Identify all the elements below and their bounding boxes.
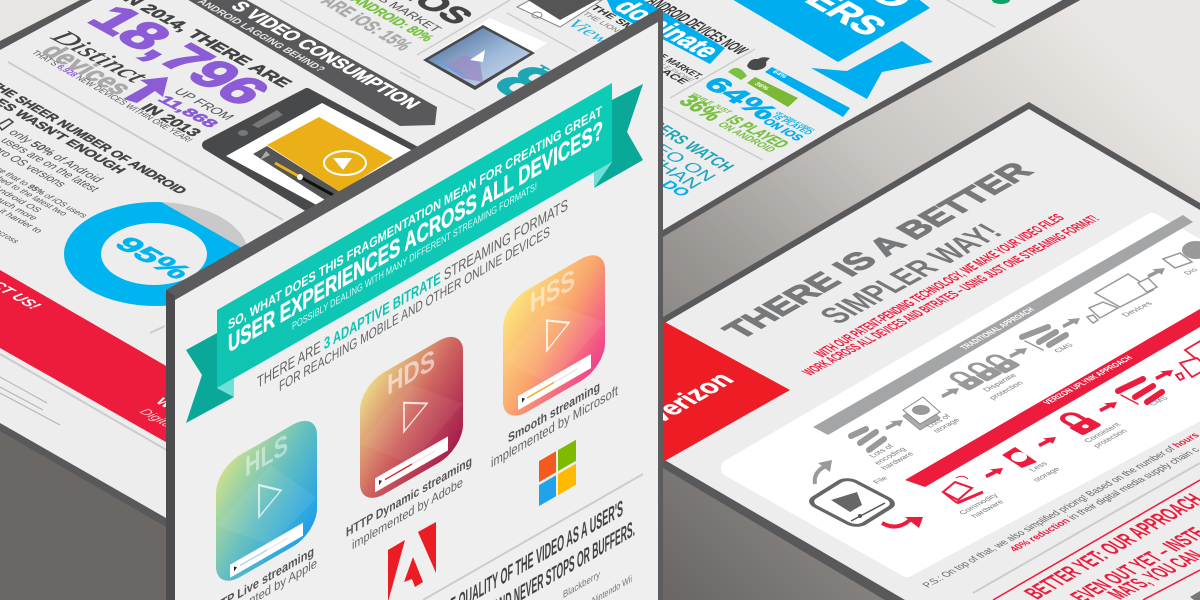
icon: red drive (1002, 447, 1037, 468)
panel: right infographic sheet (638, 102, 1200, 600)
icon: encoding hardware (851, 429, 884, 450)
bar: ios share (765, 67, 850, 117)
icon: device outline (0, 119, 13, 130)
arrow: grey 5 (1148, 268, 1165, 276)
icon: storage stack (903, 397, 940, 430)
green dot (992, 0, 1010, 4)
label: encoding hardware: Lots of (867, 443, 896, 459)
control bar (230, 523, 303, 578)
icon: smartphone video (207, 93, 460, 235)
heading line 2: SIMPLER WAY! (812, 219, 1011, 329)
icon: devices grey (1087, 274, 1157, 323)
icon: apple (747, 57, 770, 70)
band sub text: Digital (136, 407, 180, 431)
icon: CMS red (1118, 379, 1162, 404)
verizon label: VERIZON UPLYNK APPROACH (1041, 354, 1135, 406)
arrow: to traditional (815, 460, 832, 484)
label: encoding hardware: encoding (872, 446, 908, 466)
band text: We (152, 396, 184, 414)
market line: E MARKET, (655, 53, 705, 81)
play icon (404, 389, 427, 432)
platform list 1: Blackberry (563, 568, 600, 600)
body copy: users are on the latest (0, 136, 103, 194)
HLS label: HLS (245, 428, 288, 484)
chart: 95 percent donut (64, 202, 248, 306)
banner heading: S VIDEO CONSUMPTION (226, 0, 425, 112)
verizon header bar (905, 309, 1200, 487)
bar: android share: 36% (752, 82, 770, 91)
label: distribution: Dis (1182, 267, 1200, 276)
sub caption: THAT'S 6,928 NEW DEVICES WITHIN ONE YEAR! (29, 49, 195, 143)
icon: windows logo (539, 440, 576, 506)
ribbon: left fold (217, 378, 234, 397)
icon: devices red (1176, 340, 1200, 380)
control bar (518, 354, 591, 410)
arrow: red 3 (1100, 402, 1117, 410)
card: HLS (216, 411, 317, 591)
body copy (0, 128, 107, 245)
label: storage (924, 413, 963, 434)
red outlined callout (993, 480, 1200, 600)
place line: ACE (657, 68, 690, 86)
chart: 95 percent donut: 95% (107, 233, 199, 284)
intro line 2: FOR REACHING MOBILE AND OTHER ONLINE DEVICES (279, 224, 550, 395)
HDS label: HDS (387, 344, 435, 402)
icon: commodity laptop (943, 476, 983, 503)
control bar (375, 436, 448, 492)
teal text block: DO (656, 179, 693, 199)
previous number: 11,868 (153, 94, 222, 130)
cyan dominate ribbon (606, 0, 725, 64)
big cyan ribbon tail (811, 41, 933, 99)
HDS caption: HTTP Dynamic streaming (346, 453, 472, 540)
arrow: grey 4 (1063, 318, 1080, 326)
arrow: red 1 (986, 468, 1003, 476)
teal big number: 8 (477, 57, 574, 110)
icon: android (728, 68, 747, 80)
arrow: grey 1 (886, 420, 903, 428)
up from: UP FROM (170, 86, 238, 122)
intro line 1: THERE ARE 3 ADAPTIVE BITRATE STREAMING FORMATS (257, 195, 568, 392)
label: commodity: Commodity (957, 492, 1000, 516)
label: consistent: Consistent (1082, 421, 1123, 444)
icon: up arrow (123, 77, 168, 103)
traditional label: TRADITIONAL APPROACH (958, 306, 1037, 351)
play icon (259, 472, 281, 517)
HDS caption: implemented by Adobe (352, 474, 463, 552)
icon: red lock (1055, 410, 1102, 436)
label: protection: protection (987, 380, 1025, 401)
label: storage: Lots of (924, 413, 953, 429)
label: less storage: Less (1027, 461, 1050, 473)
teal heading: TH (527, 63, 564, 83)
36 percent: 36% (674, 92, 728, 125)
while just: WHILE JUST (688, 92, 734, 115)
traditional header bar (813, 215, 1193, 435)
arrow: grey 2 (942, 388, 959, 396)
panel: back infographic sheet (0, 0, 1084, 527)
label: encoding hardware (867, 443, 916, 471)
label: encoding hardware: hardware (879, 450, 916, 471)
bar: android share (747, 77, 798, 107)
icon: adobe logo (388, 522, 436, 600)
background: light top-left corner (0, 0, 90, 46)
label: consistent (1082, 421, 1129, 449)
ribbon: right fold (594, 162, 612, 188)
mobile video caption: OF MOBILE VIDEO (773, 111, 816, 133)
icon: three locks (946, 352, 1021, 391)
label: CMS red row: CMS (1147, 395, 1170, 407)
small grey caption: THE LION'S (580, 11, 628, 37)
ribbon heading line 1: SO, WHAT DOES THIS FRAGMENTATION MEAN FOR CREATING GREAT (228, 104, 602, 334)
fine print (0, 377, 60, 425)
phone line: LE PHONE (658, 63, 696, 83)
banner subheading: ANDROID LAGGING BEHIND? (194, 0, 327, 74)
label: protection: Disparate (981, 372, 1019, 393)
label: CMS: CMS (1052, 342, 1075, 354)
arrow: red 2 (1039, 437, 1056, 446)
green played: IS PLAYED (721, 113, 793, 150)
teal text block: USERS WATCH (637, 113, 739, 174)
script word: Distinct (44, 26, 156, 87)
icon: tablet video (423, 18, 547, 90)
ribbon sub line: POSSIBLY DEALING WITH MANY DIFFERENT STREAMING FORMATS! (292, 181, 537, 333)
label: protection (981, 372, 1025, 401)
ribbon: main band (217, 83, 612, 388)
red verizon corner (663, 321, 790, 462)
green android: ON ANDROID (714, 121, 778, 154)
big cyan ribbon body (730, 0, 930, 62)
label: devices: Devices (1119, 300, 1154, 318)
icon: phone outline (517, 0, 602, 27)
arrow: red 4 (1156, 370, 1173, 378)
ribbon heading line 2: USER EXPERIENCES ACROSS ALL DEVICES? (228, 115, 603, 358)
icon: distribution (1163, 241, 1200, 268)
label: less storage: storage (1031, 466, 1063, 483)
dark banner (185, 0, 437, 126)
teal text block: DEO ON (637, 134, 721, 184)
label: consistent: protection (1091, 428, 1129, 449)
card: HSS (503, 245, 605, 426)
teal text block: THAN (642, 153, 707, 192)
label: storage: storage (931, 417, 963, 434)
HSS caption: implemented by Microsoft (491, 382, 619, 471)
label: less storage (1027, 461, 1063, 483)
label: commodity: hardware (969, 498, 1006, 519)
card: HDS (360, 327, 463, 508)
arrow: grey 3 (1010, 348, 1027, 356)
ios caption: ON IOS (759, 117, 807, 143)
verizon wordmark: Verizon (638, 368, 740, 427)
file label: File (871, 475, 890, 485)
icon: CMS grey (1022, 327, 1066, 350)
script cyan text: View (562, 16, 617, 46)
small caption: THE SM (587, 4, 637, 31)
arrow: to verizon (882, 517, 923, 528)
play icon (547, 308, 569, 350)
HSS caption: Smooth streaming (508, 378, 600, 446)
icon: file (807, 477, 897, 528)
body copy: only 50% of Android (5, 128, 107, 184)
panel: white workflow card (730, 215, 1200, 568)
red contact band (0, 270, 180, 450)
grey word: devices (35, 40, 140, 99)
big 64 percent: 64% (697, 72, 786, 124)
ribbon: right tail (594, 84, 643, 188)
previous year: IN 2013 (136, 102, 204, 139)
played caption: IS PLAYED (770, 113, 816, 136)
heading line 1: THERE IS A BETTER (716, 158, 1041, 344)
big number: 18,796 (76, 0, 283, 113)
HSS label: HSS (530, 263, 575, 320)
ribbon: left tail (186, 333, 234, 423)
panel: front infographic sheet (166, 8, 663, 600)
bar: ios share: 64% (770, 70, 788, 79)
